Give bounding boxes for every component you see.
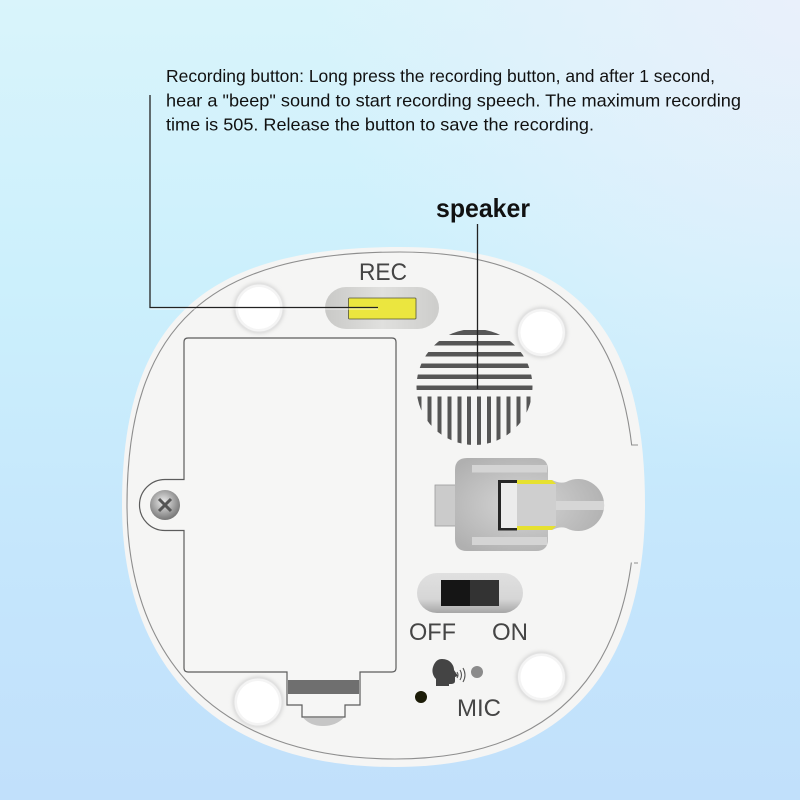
recording button description: time is 505. Release the button to save the recording. [166,114,594,134]
recording button description [166,66,741,134]
speaker heading: speaker [436,193,530,223]
leader line: speaker [476,224,478,389]
prong [517,484,556,526]
leader line: recording button [150,95,378,309]
speaker grille [416,330,532,445]
device body [122,247,645,767]
battery cover [140,338,396,726]
record button [325,287,439,329]
microphone hole [415,691,427,703]
REC label: REC [359,259,407,286]
socket left tab [435,485,459,526]
icon: speaking head [432,659,465,686]
mounting post top left [234,283,284,333]
plug socket [435,458,604,551]
indicator light [471,666,483,678]
icon: screw [150,490,180,520]
socket outline [455,458,604,551]
mounting post bottom right [516,652,566,702]
ON label: ON [492,619,528,646]
latch shadow [303,718,344,726]
mounting post top right [516,308,566,358]
recording button description: hear a "beep" sound to start recording speech. The maximum recording [166,90,741,110]
latch gray band [288,680,359,694]
recording button description: Recording button: Long press the recording button, and after 1 second, [166,66,715,86]
power switch [417,573,523,613]
OFF label: OFF [409,619,456,646]
mounting post bottom left [233,677,283,727]
socket ridges [472,465,547,472]
MIC label: MIC [457,695,501,722]
